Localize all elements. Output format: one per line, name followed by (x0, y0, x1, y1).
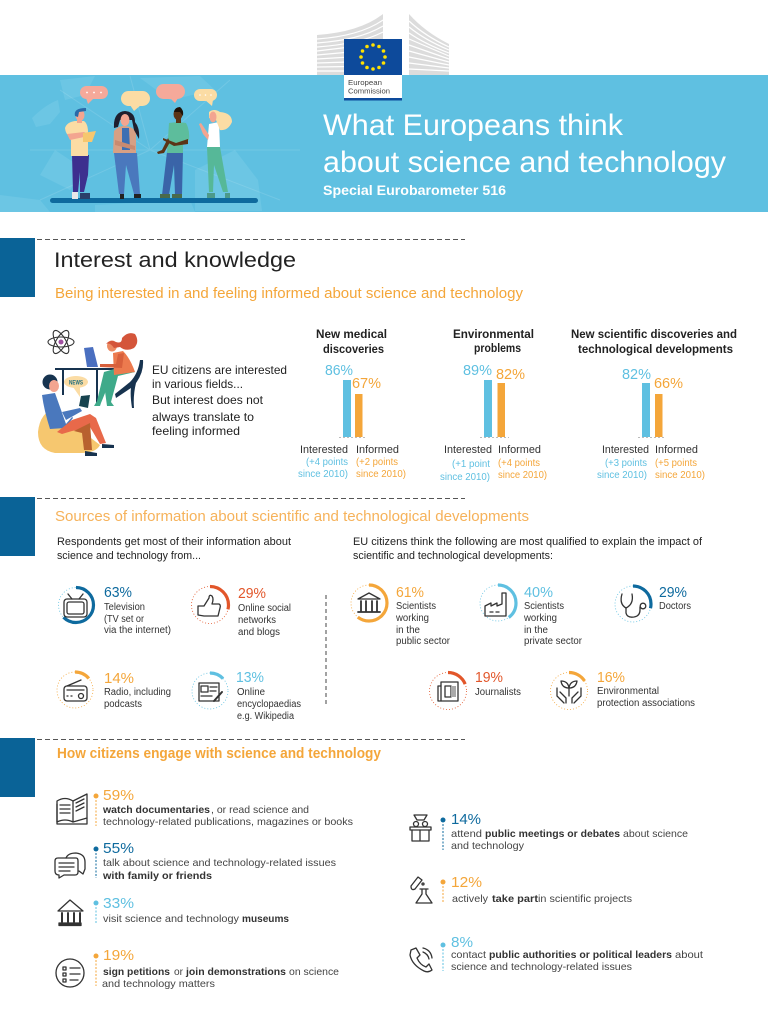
engagement: public meetings 14%: attend (451, 828, 482, 840)
engagement: petitions 19%: or (174, 966, 183, 978)
platform (50, 198, 258, 203)
text: qualified intro: scientific and technological developments: (353, 550, 553, 562)
engagement: public meetings 14%: public meetings or debates (485, 828, 620, 840)
stat: online encyclopaedias: encyclopaedias (237, 699, 301, 710)
stat: online encyclopaedias: e.g. Wikipedia (237, 711, 294, 722)
stat: online encyclopaedias: 13% (236, 670, 264, 686)
icon: museum (58, 900, 83, 926)
stat: online social networks: 29% (238, 586, 266, 602)
stat: television: Television (104, 602, 145, 613)
building graphic (317, 14, 449, 75)
person 2 (113, 111, 141, 199)
section marker 2 (0, 497, 465, 556)
bar chart: environmental problems: since 2010) (440, 472, 490, 483)
bar chart: scientific discoveries and technological developments: Interested (602, 444, 649, 456)
bar chart: new medical discoveries: discoveries (323, 342, 384, 356)
bar chart: scientific discoveries and technological developments: (+3 points (605, 458, 647, 469)
engagement: take part 12%: actively (452, 893, 489, 905)
stat: television: 63% (104, 585, 132, 601)
intro text: in various fields... (152, 377, 243, 391)
stat: scientists private sector: Scientists (524, 601, 564, 612)
engagement: take part 12% (411, 875, 632, 905)
bar chart: scientific discoveries and technological developments: since 2010) (597, 470, 647, 481)
icon: checklist (56, 959, 84, 987)
engagement: museums 33%: visit science and technology (103, 913, 240, 925)
chair (115, 360, 143, 408)
engagement: petitions 19% (56, 948, 339, 990)
engagement: museums 33%: 33% (103, 896, 134, 912)
stat: doctors (615, 585, 691, 622)
title: What Europeans think (323, 109, 624, 142)
subheading: interested and informed: Being interested in and feeling informed about science and technology (55, 286, 524, 302)
engagement: petitions 19%: and technology matters (102, 978, 215, 990)
bar chart: new medical discoveries: Informed (356, 444, 399, 456)
section marker 3 (0, 738, 465, 797)
stat: online social networks: and blogs (238, 627, 280, 638)
illustration: people reading news (38, 328, 143, 456)
bar chart: environmental problems: 89% (463, 363, 492, 379)
header banner (0, 75, 768, 212)
engagement: public authorities 8%: 8% (451, 935, 473, 951)
stat: scientists private sector: private sector (524, 636, 583, 647)
woman at laptop (94, 333, 137, 406)
stat: television: via the internet) (104, 625, 171, 636)
title (323, 109, 726, 198)
text: qualified intro: EU citizens think the following are most qualified to explain the impact of (353, 536, 703, 548)
stat: online social networks: Online social (238, 603, 291, 614)
stat: environmental protection associations: protection associations (597, 698, 695, 709)
person 4 (199, 110, 232, 198)
stat: scientists private sector: working (523, 613, 557, 624)
news bubble: NEWS (69, 380, 83, 386)
stat: radio: podcasts (104, 699, 142, 710)
stat: doctors: Doctors (659, 601, 691, 612)
stat: journalists: Journalists (475, 687, 521, 698)
heading: interest and knowledge: Interest and knowledge (54, 249, 296, 272)
laptop (84, 347, 98, 367)
engagement: documentaries 59%: technology-related publications, magazines or books (103, 816, 353, 828)
stat: scientists private sector: in the (524, 625, 548, 636)
stat: scientists public sector: public sector (396, 636, 451, 647)
speech bubbles (80, 84, 217, 111)
text: respondents intro (57, 536, 291, 562)
person 1 (65, 108, 96, 199)
bar chart: new medical discoveries: Interested (300, 444, 348, 456)
engagement: petitions 19%: 19% (103, 948, 134, 964)
engagement: documentaries 59%: watch documentaries (102, 804, 210, 816)
European Commission logo (317, 14, 449, 100)
stat: online encyclopaedias: Online (237, 687, 265, 698)
bar chart: environmental problems: Interested (444, 444, 492, 456)
stat: scientists private sector (480, 585, 583, 647)
bar chart: scientific discoveries and technological developments: Informed (655, 444, 698, 456)
engagement: museums 33%: museums (242, 913, 289, 925)
bar chart: new medical discoveries: 86% (325, 363, 353, 379)
man on beanbag (38, 374, 114, 456)
stat: television: (TV set or (104, 614, 145, 625)
stat: scientists public sector: Scientists (396, 601, 436, 612)
bar chart: environmental problems: (+1 point (452, 459, 490, 470)
bar chart: new medical discoveries: since 2010) (298, 469, 348, 480)
text: qualified intro (353, 536, 703, 562)
EU stars (359, 43, 387, 71)
stat: scientists public sector: working (395, 613, 429, 624)
engagement: public authorities 8%: about (675, 949, 703, 961)
engagement: documentaries 59% (57, 788, 353, 828)
bar chart: new medical discoveries: New medical (316, 327, 387, 341)
subheading: how citizens engage: How citizens engage with science and technology (57, 746, 381, 762)
engagement: petitions 19%: join demonstrations (185, 966, 286, 978)
engagement: public authorities 8%: contact (451, 949, 486, 961)
bar chart: new medical discoveries: (+4 points (306, 457, 348, 468)
icon: open book (57, 794, 87, 824)
bar chart: scientific discoveries and technological developments: technological developments (578, 342, 733, 356)
bar chart: scientific discoveries and technological developments (571, 327, 737, 481)
stat: journalists (430, 670, 521, 710)
stat: environmental protection associations: 16% (597, 670, 625, 686)
icon: flask and test tube (411, 877, 432, 903)
bar chart: environmental problems: Informed (498, 444, 541, 456)
bar chart: new medical discoveries (298, 327, 406, 480)
engagement: public authorities 8% (410, 935, 703, 973)
stat: online encyclopaedias (192, 670, 301, 722)
icon: phone (410, 948, 432, 972)
desk (55, 368, 117, 406)
engagement: take part 12%: in scientific projects (538, 893, 632, 905)
engagement: take part 12%: 12% (451, 875, 482, 891)
subheading: sources of information: Sources of information about scientific and technological developments (55, 509, 529, 525)
engagement: public meetings 14% (410, 812, 688, 852)
bar chart: new medical discoveries: since 2010) (356, 469, 406, 480)
intro text (152, 363, 287, 438)
stat: radio: Radio, including (104, 687, 171, 698)
stat: radio: 14% (104, 671, 134, 687)
stat: environmental protection associations (550, 670, 695, 710)
bar chart: scientific discoveries and technological developments: 82% (622, 367, 651, 383)
intro text: feeling informed (152, 424, 240, 438)
engagement: public meetings 14%: about science (623, 828, 688, 840)
intro text: But interest does not (152, 393, 264, 407)
stat: radio (57, 671, 171, 710)
stat: scientists public sector (351, 585, 451, 647)
engagement: public authorities 8%: public authorities or political leaders (489, 949, 672, 961)
stat: online social networks: networks (238, 615, 276, 626)
engagement: public authorities 8%: science and technology-related issues (451, 961, 632, 973)
bar chart: scientific discoveries and technological developments: since 2010) (655, 470, 705, 481)
bar chart: scientific discoveries and technological developments: New scientific discoveries and (571, 327, 737, 341)
bar chart: environmental problems: problems (474, 341, 521, 355)
engagement: take part 12%: take part (492, 893, 539, 905)
icon: lectern (410, 815, 431, 841)
title: Special Eurobarometer 516 (323, 182, 506, 198)
stat: television (58, 585, 171, 636)
text: respondents intro: Respondents get most of their information about (57, 536, 291, 548)
text: respondents intro: science and technology from... (57, 550, 201, 562)
engagement: public meetings 14%: and technology (451, 840, 525, 852)
intro text: always translate to (152, 410, 254, 424)
engagement: museums 33% (58, 896, 289, 926)
engagement: documentaries 59%: , or read science and (211, 804, 309, 816)
stat: journalists: 19% (475, 670, 503, 686)
bar chart: environmental problems (440, 327, 547, 483)
bar chart: environmental problems: since 2010) (498, 470, 547, 481)
engagement: petitions 19%: sign petitions (103, 966, 170, 978)
person 3 (157, 107, 189, 198)
bar chart: environmental problems: (+4 points (498, 458, 540, 469)
stat: doctors: 29% (659, 585, 687, 601)
stat: scientists public sector: 61% (396, 585, 424, 601)
engagement: documentaries 59%: 59% (103, 788, 134, 804)
stat: environmental protection associations: Environmental (597, 686, 659, 697)
engagement: public meetings 14%: 14% (451, 812, 481, 828)
section marker 1 (0, 238, 465, 297)
stat: online social networks (192, 586, 291, 638)
icon: atom (48, 328, 74, 356)
engagement: family or friends 55% (55, 841, 336, 882)
bar chart: scientific discoveries and technological developments: 66% (654, 376, 683, 392)
title: about science and technology (323, 146, 726, 179)
intro text: EU citizens are interested (152, 363, 287, 377)
bar chart: new medical discoveries: 67% (352, 376, 381, 392)
engagement: family or friends 55%: 55% (103, 841, 134, 857)
engagement: petitions 19%: on science (289, 966, 339, 978)
stat: scientists private sector: 40% (524, 585, 553, 601)
stat: scientists public sector: in the (396, 625, 420, 636)
European Commission logo: Commission (348, 86, 390, 96)
bar chart: environmental problems: 82% (496, 367, 525, 383)
engagement: family or friends 55%: with family or friends (102, 870, 212, 882)
icon: speech bubbles (55, 853, 85, 878)
illustration: four people talking (50, 84, 258, 203)
bar chart: environmental problems: Environmental (453, 327, 534, 341)
engagement: family or friends 55%: talk about science and technology-related issues (103, 857, 336, 869)
bar chart: new medical discoveries: (+2 points (356, 457, 398, 468)
European Commission logo: European (348, 78, 382, 87)
bar chart: scientific discoveries and technological developments: (+5 points (655, 458, 697, 469)
